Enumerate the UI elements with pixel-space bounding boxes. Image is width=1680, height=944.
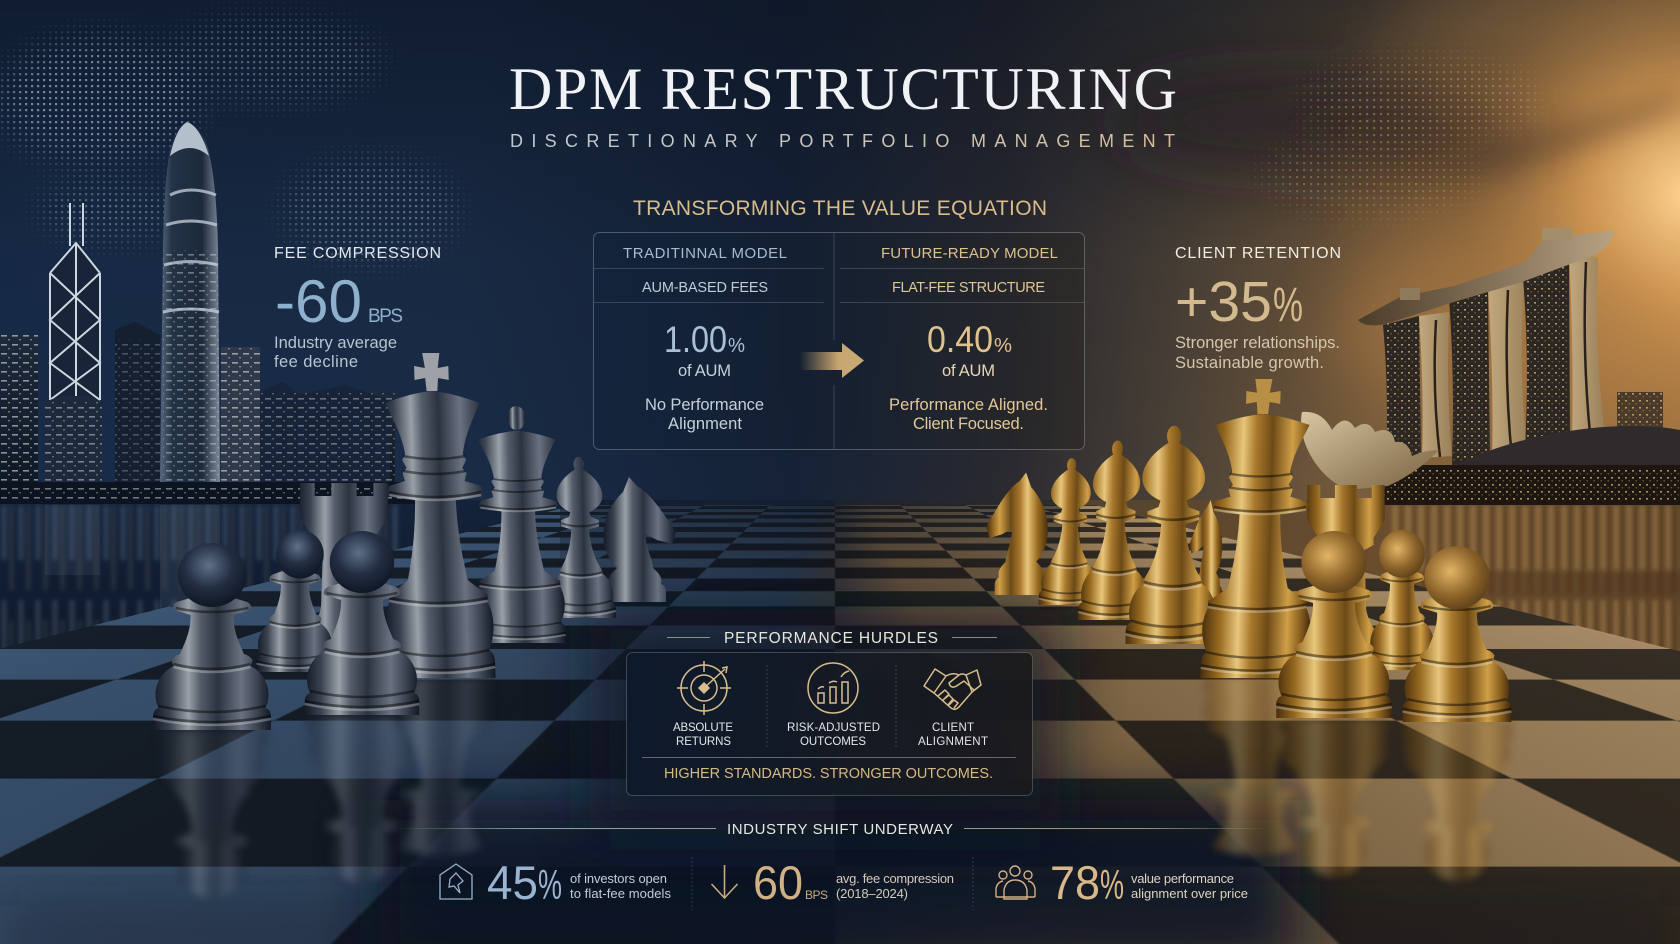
right callout: client retention: +35 — [1175, 270, 1272, 334]
Marina Bay Sands skyline — [1301, 228, 1680, 505]
label: risk-adjusted outcomes: OUTCOMES — [800, 736, 866, 748]
left callout: fee compression: -60 — [275, 268, 362, 335]
icon: down arrow — [712, 865, 738, 898]
gold bishop two — [1078, 440, 1153, 620]
gold bishop one — [1038, 458, 1101, 605]
hotel towers — [1383, 252, 1604, 465]
heading: industry shift underway: INDUSTRY SHIFT UNDERWAY — [727, 821, 953, 838]
label: risk-adjusted outcomes — [787, 722, 880, 748]
traditional model column: TRADITINNAL MODEL — [623, 245, 787, 262]
silver chess set — [153, 353, 676, 730]
icon: target — [677, 661, 731, 715]
left callout: fee compression: BPS — [368, 306, 403, 327]
water: right — [835, 500, 1680, 690]
silver pawn front — [305, 531, 419, 715]
future-ready model column: FLAT-FEE STRUCTURE — [892, 280, 1045, 296]
stat: 60 bps: avg. fee compression — [836, 871, 954, 886]
gold king — [1200, 379, 1318, 678]
label: absolute returns: RETURNS — [676, 736, 731, 748]
stat: 78 percent: alignment over price — [1131, 886, 1248, 901]
traditional model column: AUM-BASED FEES — [642, 280, 768, 296]
icon: shield house — [440, 864, 472, 899]
stat: 45 percent — [440, 856, 672, 909]
right callout: client retention — [1175, 245, 1341, 372]
silver pawn left — [153, 543, 271, 730]
water: left — [0, 500, 835, 690]
sky gradient — [0, 0, 1680, 680]
left callout: fee compression: fee decline — [274, 353, 358, 371]
future-ready model column: Performance Aligned. — [889, 396, 1048, 414]
stat: 45 percent: to flat-fee models — [570, 886, 672, 901]
gold small knight behind — [1190, 500, 1222, 600]
left callout: fee compression — [274, 245, 441, 371]
ArtScience lotus — [1301, 412, 1439, 490]
label: client alignment: CLIENT — [932, 722, 974, 734]
tagline: HIGHER STANDARDS. STRONGER OUTCOMES. — [664, 766, 993, 782]
traditional model column: No Performance — [645, 396, 764, 414]
stat: 45 percent: % — [538, 861, 562, 908]
panel: fee model comparison — [594, 232, 1084, 450]
icon: rising bar chart — [808, 663, 858, 713]
stat: 60 bps: 60 — [753, 856, 803, 909]
Hong Kong skyline — [0, 122, 430, 504]
gold pawn middle — [1276, 531, 1392, 718]
traditional model column: Alignment — [668, 415, 742, 433]
stat: 45 percent: of investors open — [570, 871, 667, 886]
golden data dot grid — [1254, 50, 1543, 220]
floor shading — [0, 500, 1680, 944]
stat: 45 percent: 45 — [487, 856, 538, 909]
left callout: fee compression: Industry average — [274, 334, 397, 352]
right callout: client retention: CLIENT RETENTION — [1175, 245, 1341, 262]
arrow: traditional to future-ready — [800, 343, 864, 378]
world map dot grid — [1, 7, 465, 273]
label: client alignment — [918, 722, 988, 748]
stat: 78 percent: 78 — [1050, 856, 1100, 909]
right callout: client retention: % — [1273, 279, 1303, 332]
label: risk-adjusted outcomes: RISK-ADJUSTED — [787, 722, 880, 734]
gold knight — [986, 472, 1048, 595]
traditional model column: 1.00 — [664, 319, 727, 360]
Bank of China tower — [45, 203, 102, 490]
silver bishop — [545, 457, 616, 618]
stat: 60 bps: (2018–2024) — [836, 886, 908, 901]
title: DPM RESTRUCTURING — [509, 56, 1177, 122]
stat: 60 bps — [692, 856, 973, 910]
gold chess set — [986, 379, 1511, 722]
sky park deck — [1358, 231, 1614, 325]
icon: handshake — [924, 669, 981, 709]
International Finance Centre tower — [160, 122, 220, 485]
label: client alignment: ALIGNMENT — [918, 736, 988, 748]
left callout: fee compression: FEE COMPRESSION — [274, 245, 441, 262]
silver queen — [471, 406, 566, 643]
future-ready model column: 0.40 — [927, 319, 993, 360]
silver knight — [603, 477, 676, 602]
stat: 60 bps: BPS — [805, 888, 828, 902]
heading: transforming the value equation: TRANSFORMING THE VALUE EQUATION — [633, 197, 1047, 220]
stat: 78 percent: value performance — [1131, 871, 1234, 886]
gold pawn back — [1369, 530, 1435, 670]
piece reflections on the board — [157, 678, 1512, 898]
traditional model column: of AUM — [678, 362, 731, 380]
label: absolute returns: ABSOLUTE — [673, 722, 733, 734]
gold bishop three — [1126, 426, 1221, 644]
convention centre dome — [1447, 426, 1680, 470]
right callout: client retention: Sustainable growth. — [1175, 354, 1324, 372]
future-ready model column: of AUM — [942, 362, 995, 380]
right callout: client retention: Stronger relationships. — [1175, 334, 1340, 352]
panel: performance hurdles — [626, 652, 1032, 796]
traditional model column — [623, 245, 787, 433]
future-ready model column: Client Focused. — [913, 415, 1024, 433]
traditional model column: % — [728, 335, 745, 357]
future-ready model column: % — [994, 335, 1012, 357]
silver king — [376, 353, 496, 678]
label: absolute returns — [673, 722, 733, 748]
icon: people — [996, 866, 1035, 899]
stat: 78 percent — [996, 856, 1248, 909]
future-ready model column — [881, 245, 1058, 433]
silver pawn back — [256, 530, 334, 672]
stat: 78 percent: % — [1100, 861, 1124, 908]
future-ready model column: FUTURE-READY MODEL — [881, 245, 1058, 262]
silver rook — [297, 483, 391, 668]
gold rook — [1305, 485, 1387, 670]
background: sky, skylines and water — [0, 0, 1680, 651]
heading: performance hurdles: PERFORMANCE HURDLES — [724, 630, 938, 647]
subtitle: DISCRETIONARY PORTFOLIO MANAGEMENT — [510, 131, 1175, 151]
gold pawn right — [1403, 546, 1511, 722]
